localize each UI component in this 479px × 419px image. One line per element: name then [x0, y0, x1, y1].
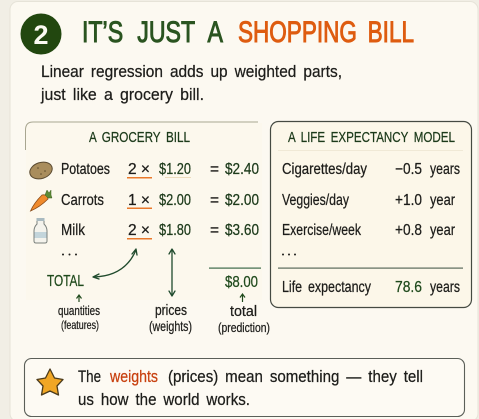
icon: star [37, 369, 63, 395]
row: exercise: +0.8 [395, 222, 422, 239]
title: IT’S JUST A [82, 16, 223, 49]
label: total prediction: (prediction) [218, 320, 270, 335]
title [82, 16, 414, 49]
row: veggies: year [430, 192, 455, 209]
arrow: prices [169, 249, 175, 296]
row: carrots: 1 × [128, 192, 150, 209]
arrow: up to prediction label [240, 294, 245, 302]
callout [24, 358, 464, 416]
label: quantities: (features) [61, 318, 99, 332]
model ellipsis [282, 254, 296, 256]
label: prices: (weights) [149, 318, 192, 334]
row: potatoes: $1.20 [159, 161, 191, 178]
total amount: $8.00 [225, 274, 258, 291]
row: life expectancy result: Life expectancy [282, 279, 371, 296]
callout text: us how the world works. [78, 391, 250, 409]
row: cigarettes [282, 161, 460, 178]
row: milk: $1.80 [159, 222, 191, 239]
row: carrots: = [210, 192, 219, 209]
ellipsis [62, 254, 77, 256]
row: cigarettes: years [430, 161, 460, 178]
label: quantities: quantities [58, 304, 100, 318]
row: potatoes [61, 161, 259, 178]
row: life expectancy result: 78.6 [395, 279, 422, 296]
label: quantities [58, 304, 100, 332]
panel: life expectancy model [270, 122, 472, 308]
grocery heading: A GROCERY BILL [89, 129, 190, 146]
arrow: quantities curve [93, 249, 137, 279]
row: life expectancy result: years [430, 279, 460, 296]
row: potatoes: Potatoes [61, 161, 110, 178]
total rule [209, 268, 261, 269]
row: exercise: Exercise/week [282, 222, 361, 239]
row: exercise [282, 222, 455, 239]
section number badge: 2 [33, 20, 49, 50]
intro text: Linear regression adds up weighted parts, [41, 62, 342, 81]
row: veggies: +1.0 [395, 192, 422, 209]
label: total prediction: total [230, 303, 257, 320]
row: cigarettes: −0.5 [395, 161, 422, 178]
panel: grocery bill [26, 122, 270, 335]
row: carrots: $2.00 [225, 192, 259, 209]
callout text: weights [109, 368, 158, 386]
label: total prediction [218, 303, 270, 335]
row: potatoes: = [210, 161, 219, 178]
arrow: up to quantities label [76, 295, 82, 302]
icon: carrot [30, 190, 52, 211]
row: veggies: Veggies/day [282, 192, 349, 209]
row: veggies [282, 192, 455, 209]
section number badge [20, 14, 62, 54]
intro text [40, 62, 342, 104]
title: SHOPPING BILL [238, 16, 414, 49]
label: prices [149, 302, 192, 334]
row: carrots [61, 192, 259, 209]
row: life expectancy result [282, 279, 460, 296]
row: milk [61, 222, 259, 240]
row: carrots: Carrots [61, 192, 104, 209]
row: milk: 2 × [128, 222, 150, 239]
row: milk: $3.60 [225, 222, 259, 239]
callout text: The [78, 368, 101, 386]
row: potatoes: $2.40 [225, 161, 259, 178]
row: exercise: year [430, 222, 455, 239]
row: milk: = [210, 222, 219, 239]
icon: potato [28, 159, 54, 182]
total label: TOTAL [47, 273, 84, 290]
icon: milk bottle [34, 218, 47, 243]
row: milk: Milk [61, 222, 85, 239]
label: prices: prices [155, 302, 187, 319]
callout text [78, 368, 423, 409]
row: carrots: $2.00 [159, 192, 191, 209]
row: cigarettes: Cigarettes/day [282, 161, 367, 178]
row: potatoes: 2 × [128, 161, 150, 178]
intro text: just like a grocery bill. [40, 85, 204, 104]
callout text: (prices) mean something — they tell [168, 368, 423, 386]
